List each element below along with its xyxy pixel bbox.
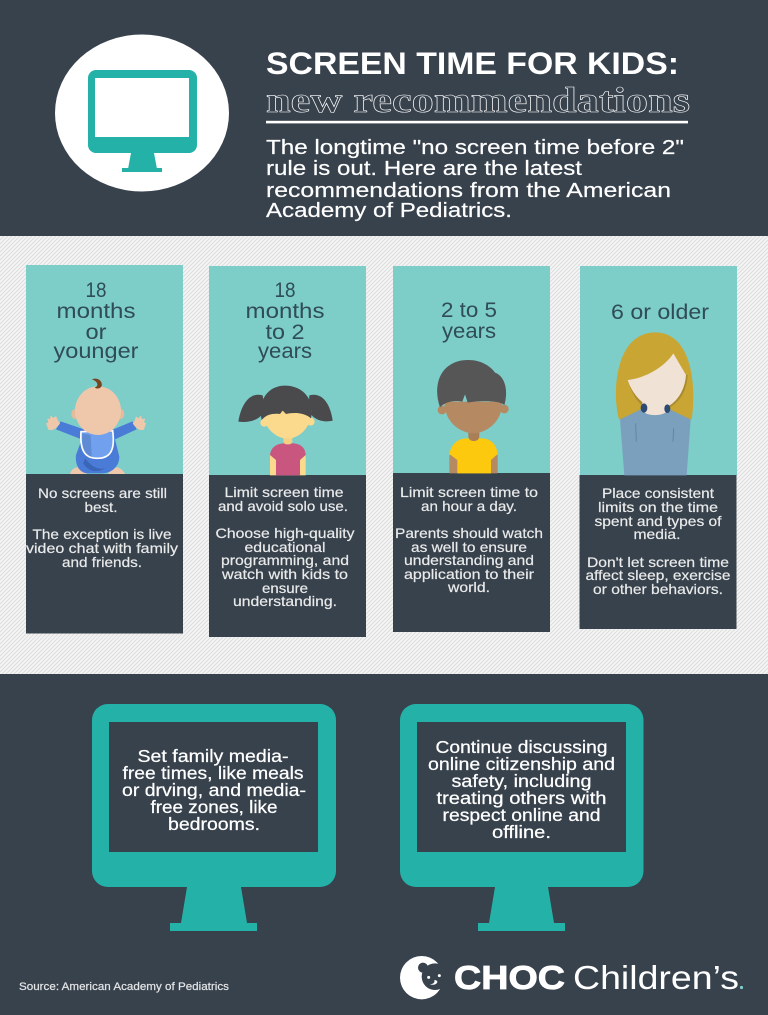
monitor: media-free times bbox=[92, 704, 336, 931]
icon: moon and bear bbox=[400, 956, 448, 999]
text: place consistent limits: Place consistent bbox=[602, 486, 714, 501]
text: no screens: best. bbox=[84, 500, 118, 515]
text: limit to an hour: understanding and bbox=[404, 553, 534, 568]
icon: girl with pigtails bbox=[238, 386, 333, 475]
text: limit screen time: ensure bbox=[262, 581, 308, 596]
heading: 18 months to 2 years: to 2 bbox=[266, 320, 304, 344]
text: limit screen time: watch with kids to bbox=[221, 567, 348, 582]
heading: 18 months or younger bbox=[54, 278, 138, 363]
monitor: online citizenship bbox=[400, 704, 644, 931]
text: online citizenship: Continue discussing bbox=[436, 737, 608, 757]
panel: 6 or older bbox=[580, 266, 737, 629]
text: online citizenship: treating others with bbox=[436, 788, 606, 808]
text: media-free times: or drving, and media- bbox=[122, 780, 306, 800]
text: limit screen time: understanding. bbox=[233, 594, 337, 609]
text: no screens: video chat with family bbox=[26, 541, 178, 556]
intro text: Academy of Pediatrics. bbox=[266, 200, 512, 222]
text: media-free times: bedrooms. bbox=[168, 814, 260, 834]
heading: 18 months to 2 years: 18 bbox=[274, 278, 296, 302]
text: place consistent limits: media. bbox=[634, 527, 680, 542]
text: no screens bbox=[26, 486, 178, 570]
heading: 18 months to 2 years bbox=[246, 278, 324, 363]
text: limit to an hour: world. bbox=[447, 580, 490, 595]
heading: 6 or older: 6 or older bbox=[611, 300, 709, 324]
text: online citizenship: safety, including bbox=[452, 771, 592, 791]
text: limit to an hour: Parents should watch bbox=[395, 526, 543, 541]
text: place consistent limits bbox=[586, 486, 731, 597]
heading: 18 months to 2 years: months bbox=[246, 299, 324, 323]
heading: 18 months to 2 years: years bbox=[258, 339, 312, 363]
text: limit screen time bbox=[216, 485, 355, 609]
text: online citizenship: respect online and bbox=[442, 805, 600, 825]
wordmark: CHOC: CHOC bbox=[454, 959, 565, 996]
text: place consistent limits: affect sleep, exercise bbox=[586, 568, 731, 583]
text: limit screen time: Choose high-quality bbox=[216, 526, 355, 541]
icon: woman with blond hair bbox=[616, 332, 693, 475]
heading: 2 to 5 years bbox=[441, 298, 497, 343]
heading: 18 months or younger: or bbox=[86, 320, 106, 344]
heading: 18 months or younger: 18 bbox=[86, 278, 107, 302]
text: no screens: The exception is live bbox=[32, 527, 172, 542]
text: media-free times: Set family media- bbox=[138, 746, 289, 766]
text: online citizenship: online citizenship and bbox=[428, 754, 615, 774]
icon: boy bbox=[437, 360, 509, 473]
text: media-free times: free times, like meals bbox=[122, 763, 304, 783]
text: place consistent limits: or other behaviors. bbox=[593, 582, 723, 597]
text: limit screen time: programming, and bbox=[221, 553, 349, 568]
heading: 2 to 5 years: 2 to 5 bbox=[441, 298, 497, 322]
text: place consistent limits: spent and types of bbox=[594, 514, 722, 529]
text: media-free times bbox=[122, 746, 306, 834]
source note: Source: American Academy of Pediatrics bbox=[19, 981, 230, 993]
text: limit to an hour bbox=[395, 485, 543, 595]
panel: 18 months or younger bbox=[26, 265, 183, 634]
icon: baby bbox=[46, 379, 146, 474]
text: limit screen time: educational bbox=[244, 540, 326, 555]
text: limit screen time: Limit screen time bbox=[224, 485, 344, 500]
intro text: recommendations from the American bbox=[266, 180, 671, 202]
panel: 2 to 5 years bbox=[393, 266, 550, 632]
text: place consistent limits: limits on the time bbox=[598, 500, 718, 515]
header icon: monitor in white circle bbox=[55, 34, 229, 192]
heading: 18 months or younger: months bbox=[56, 299, 136, 323]
text: limit to an hour: application to their bbox=[404, 567, 534, 582]
logo: CHOC Children's bbox=[400, 956, 743, 999]
text: limit to an hour: Limit screen time to bbox=[400, 485, 538, 500]
intro text: The longtime "no screen time before 2" bbox=[266, 137, 684, 159]
title: SCREEN TIME FOR KIDS: bbox=[266, 45, 679, 81]
text: no screens: and friends. bbox=[62, 555, 142, 570]
heading: 18 months or younger: younger bbox=[54, 339, 138, 363]
text: limit to an hour: as well to ensure bbox=[411, 540, 527, 555]
intro text: rule is out. Here are the latest bbox=[266, 158, 582, 180]
text: limit screen time: and avoid solo use. bbox=[218, 499, 348, 514]
text: place consistent limits: Don't let screen time bbox=[587, 555, 729, 570]
intro text bbox=[266, 121, 688, 222]
subtitle: new recommendations bbox=[266, 80, 690, 120]
text: online citizenship bbox=[428, 737, 615, 842]
text: no screens: No screens are still bbox=[38, 486, 167, 501]
text: online citizenship: offline. bbox=[492, 822, 551, 842]
heading: 2 to 5 years: years bbox=[442, 319, 496, 343]
text: limit to an hour: an hour a day. bbox=[421, 499, 517, 514]
text: media-free times: free zones, like bbox=[150, 797, 278, 817]
wordmark period bbox=[740, 986, 743, 989]
wordmark: Children's: Children’s bbox=[573, 959, 739, 996]
panel: 18 months to 2 years bbox=[209, 266, 366, 637]
